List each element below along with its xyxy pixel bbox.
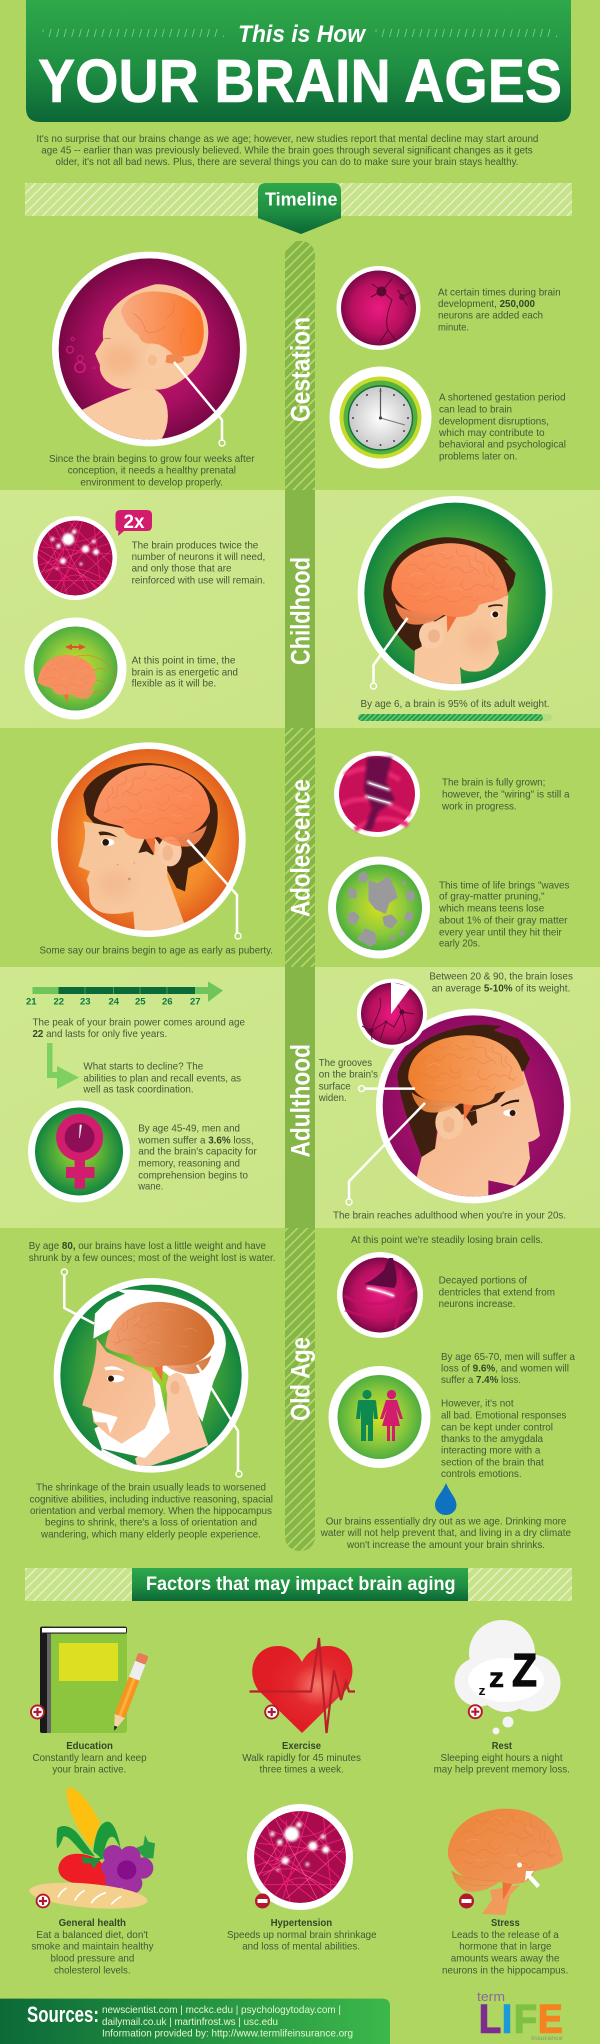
- sources footer: Sources:: [27, 2002, 99, 2027]
- factor: rest text: Sleeping eight hours a night: [440, 1752, 563, 1764]
- text: age 65-70: all bad. Emotional responses: [441, 1410, 566, 1422]
- text: wiring: The brain is fully grown;: [442, 776, 545, 788]
- label: Adulthood: Adulthood: [286, 1044, 316, 1158]
- factor: education text: your brain active.: [52, 1764, 126, 1776]
- text: neurons added: minute.: [438, 322, 469, 334]
- text: energetic and flexible: [132, 654, 238, 690]
- text: age 65-70: However, it's not: [441, 1398, 514, 1410]
- factor: general health text: blood pressure and: [50, 1952, 134, 1964]
- factor: hypertension text: Speeds up normal brain shrinkage: [227, 1929, 377, 1941]
- decorative dashes right: '///////////////////////.: [375, 28, 558, 40]
- text: age 65-70: interacting more with a: [441, 1444, 541, 1456]
- text: weight loss 5-10%: Between 20 & 90, the brain loses: [429, 970, 573, 982]
- sources footer: dailymail.co.uk | martinfrost.ws | usc.edu: [102, 2016, 278, 2028]
- text: dry out: [320, 1516, 571, 1551]
- factor: exercise heart icon: [250, 1638, 355, 1733]
- leader line: child: [370, 618, 408, 689]
- text: weight loss 5-10%: [429, 970, 573, 994]
- caption: adult weight: By age 6, a brain is 95% of its adult weight.: [360, 698, 550, 710]
- text: decline: abilities to plan and recall events, as: [83, 1072, 241, 1084]
- text: neurons added: At certain times during brain: [438, 286, 561, 298]
- text: twice the neurons: [132, 540, 265, 586]
- factor: exercise text: [242, 1740, 361, 1776]
- logo: term life insurance: [477, 1989, 563, 2042]
- leader line: grooves: [359, 1086, 415, 1092]
- factor: education text: Education: [66, 1740, 113, 1752]
- factor: stress text: neurons in the hippocampus.: [442, 1964, 568, 1976]
- factor: general health food icon: [28, 1788, 155, 1913]
- text: grooves: widen.: [318, 1092, 347, 1104]
- factor: exercise text: three times a week.: [260, 1764, 344, 1776]
- minus badge: [255, 1894, 270, 1908]
- decorative dashes left: '///////////////////////.: [42, 28, 225, 40]
- text: grooves: on the brain's: [319, 1068, 378, 1080]
- intro paragraph: older, it's not all bad news. Plus, there are several things you can do to make sure your brain stays healthy.: [56, 156, 518, 168]
- factor: hypertension text: Hypertension: [271, 1917, 332, 1929]
- text: shortened gestation: can lead to brain: [439, 404, 512, 416]
- header banner: [26, 0, 571, 122]
- chart: peak age arrow: 27: [190, 996, 201, 1008]
- text: shrinkage: wandering, which many elderly people experience.: [40, 1528, 261, 1540]
- chart: peak age arrow: 26: [162, 996, 173, 1008]
- icon: water drop: [435, 1483, 456, 1515]
- text: energetic and flexible: At this point in time, the: [132, 654, 236, 666]
- chart: peak age arrow: 23: [80, 996, 91, 1008]
- text: grooves: surface: [319, 1080, 351, 1092]
- sources footer: Information provided by: http://www.termlifeinsurance.org: [102, 2028, 353, 2040]
- logo: term life insurance: I: [502, 1998, 512, 2042]
- text: age 45-49: and the brain's capacity for: [138, 1146, 257, 1158]
- illustration: adult head: [376, 1009, 571, 1203]
- text: shortened gestation: [438, 392, 566, 462]
- factor: hypertension text: and loss of mental abilities.: [242, 1940, 360, 1952]
- text: decline: [82, 1060, 241, 1096]
- logo: term life insurance: term: [477, 1989, 505, 2004]
- text: gray matter: about 1% of their gray matter: [439, 914, 568, 926]
- label: Adolescence: Adolescence: [286, 779, 316, 917]
- text: twice the neurons: reinforced with use will remain.: [132, 574, 265, 586]
- timeline heading: Timeline: [265, 190, 338, 210]
- text: shrinkage: The shrinkage of the brain usually leads to worsened: [36, 1482, 266, 1494]
- text: shortened gestation: which may contribute to: [438, 427, 545, 439]
- text: age 65-70: thanks to the amygdala: [441, 1433, 543, 1445]
- factors heading: Factors that may impact brain aging: [146, 1574, 456, 1595]
- chart: peak age arrow: [26, 982, 223, 1008]
- chart: peak age arrow: 22: [54, 996, 64, 1008]
- factors heading: [25, 1568, 572, 1601]
- text: age 80: By age 80, our brains have lost a little weight and have: [29, 1240, 266, 1252]
- text: weight loss 5-10%: an average 5-10% of its weight.: [432, 982, 570, 994]
- arrow: decline elbow: [47, 1043, 79, 1089]
- factor: rest cloud icon: [454, 1620, 560, 1734]
- plus badge: [264, 1704, 279, 1720]
- leader line: baby: [174, 362, 225, 446]
- logo: term life insurance: F: [514, 1998, 537, 2042]
- title line 2: YOUR BRAIN AGES: [38, 47, 562, 115]
- progress bar: 95 percent: [358, 714, 552, 721]
- text: grooves: [318, 1057, 378, 1104]
- factor: rest cloud icon: Z: [512, 1644, 537, 1696]
- text: age 80: [29, 1240, 276, 1264]
- text: peak brain power: 22 and lasts for only five years.: [32, 1028, 167, 1040]
- text: age 80: shrunk by a few ounces; most of the weight lost is water.: [29, 1252, 276, 1264]
- leader line: adulthood: [346, 1103, 425, 1205]
- factor: general health text: Eat a balanced diet, don't: [36, 1929, 148, 1941]
- chart: peak age arrow: 25: [135, 996, 146, 1008]
- factor: rest text: [434, 1740, 570, 1776]
- text: age 65-70: loss of 9.6%, and women will: [441, 1362, 569, 1374]
- section band: adulthood: [0, 967, 600, 1228]
- leader line: elderly upper: [61, 1269, 94, 1324]
- factor: general health text: [31, 1917, 154, 1976]
- text: age 65-70: controls emotions.: [441, 1468, 522, 1480]
- factor: rest cloud icon: z: [478, 1683, 486, 1698]
- chart: peak age arrow: 24: [108, 996, 120, 1008]
- text: age 45-49: memory, reasoning and: [138, 1158, 240, 1170]
- timeline heading: [25, 183, 572, 234]
- text: energetic and flexible: brain is as energetic and: [132, 666, 238, 678]
- label: Old Age: Old Age: [286, 1337, 316, 1421]
- factor: general health text: General health: [59, 1917, 126, 1929]
- icon: decayed dendrite: [337, 1252, 423, 1338]
- intro paragraph: age 45 -- earlier than was previously believed. While the brain goes through several significant changes as it gets: [41, 144, 533, 156]
- text: age 45-49: [137, 1122, 257, 1192]
- icon: shrinking brain wedge: [357, 979, 427, 1049]
- text: age 45-49: By age 45-49, men and: [138, 1122, 240, 1134]
- icon: 2x neurons circle: [33, 516, 117, 600]
- text: dry out: Our brains essentially dry out as we age. Drinking more: [326, 1516, 567, 1528]
- text: dentricles: Decayed portions of: [439, 1274, 527, 1286]
- leader line: elderly lower: [197, 1365, 242, 1477]
- text: gray matter: of gray-matter pruning,": [439, 890, 545, 902]
- caption: gestation: Since the brain begins to grow four weeks after: [49, 453, 255, 465]
- icon: synapse wiring: [334, 751, 420, 837]
- text: losing brain cells: At this point we're steadily losing brain cells.: [351, 1234, 543, 1246]
- icon: man and woman: [328, 1366, 430, 1468]
- icon: female symbol: [28, 1100, 130, 1202]
- text: shrinkage: begins to shrink, there's a loss of orientation and: [45, 1516, 257, 1528]
- text: wiring: [441, 776, 570, 812]
- text: neurons added: development, 250,000: [438, 298, 535, 310]
- illustration: child head: [358, 496, 552, 691]
- text: age 65-70: can be kept under control: [441, 1422, 553, 1434]
- factor: education book icon: [30, 1627, 149, 1733]
- text: shrinkage: [30, 1482, 273, 1540]
- central timeline bar: [285, 241, 315, 1551]
- text: age 45-49: wane.: [137, 1180, 163, 1192]
- text: grooves: The grooves: [319, 1057, 372, 1069]
- leader line: teen: [188, 840, 241, 939]
- factor: education text: Constantly learn and keep: [32, 1752, 147, 1764]
- intro paragraph: It's no surprise that our brains change as we age; however, new studies report that mental decline may start around: [36, 133, 539, 145]
- text: gray matter: early 20s.: [439, 938, 480, 950]
- text: age 65-70: suffer a 7.4% loss.: [441, 1374, 521, 1386]
- factor: hypertension text: [227, 1917, 377, 1952]
- text: twice the neurons: The brain produces twice the: [132, 540, 258, 552]
- intro paragraph: [36, 133, 539, 168]
- text: wiring: work in progress.: [441, 800, 517, 812]
- factor: stress text: Stress: [491, 1917, 520, 1929]
- text: energetic and flexible: flexible as it will be.: [132, 678, 216, 690]
- factor: rest text: may help prevent memory loss.: [434, 1764, 570, 1776]
- text: gray matter: This time of life brings "waves: [439, 880, 570, 892]
- factor: stress text: Leads to the release of a: [452, 1929, 559, 1941]
- plus badge: [30, 1704, 45, 1720]
- plus badge: [468, 1704, 483, 1719]
- text: dry out: water will not help prevent that, and living in a dry climate: [320, 1527, 571, 1539]
- factor: rest text: Rest: [492, 1740, 512, 1752]
- text: decline: What starts to decline? The: [83, 1060, 203, 1072]
- text: shrinkage: cognitive abilities, including inductive reasoning, spacial: [30, 1494, 273, 1506]
- text: age 65-70: By age 65-70, men will suffer a: [441, 1351, 575, 1363]
- text: gray matter: every year until they hit their: [439, 926, 562, 938]
- factor: general health text: smoke and maintain healthy: [31, 1940, 154, 1952]
- logo: term life insurance: insurance: [531, 2035, 563, 2042]
- text: age 65-70: [441, 1351, 575, 1480]
- factor: stress text: hormone that in large: [459, 1940, 552, 1952]
- sources footer: [0, 1999, 390, 2044]
- icon: flexible brain: [24, 618, 126, 720]
- title line 1: This is How: [238, 21, 366, 48]
- text: age 45-49: comprehension begins to: [138, 1170, 248, 1182]
- text: age 45-49: women suffer a 3.6% loss,: [137, 1134, 254, 1146]
- badge: 2x: [116, 510, 152, 536]
- label: Gestation: Gestation: [286, 317, 316, 422]
- illustration: baby head: [52, 252, 247, 446]
- illustration: teen head: [51, 742, 246, 937]
- text: neurons added: neurons are added each: [438, 310, 543, 322]
- text: shrinkage: orientation and verbal memory. When the hippocampus: [30, 1505, 272, 1517]
- logo: term life insurance: L: [479, 1998, 501, 2042]
- section band: childhood: [0, 490, 600, 728]
- text: age 65-70: section of the brain that: [441, 1456, 544, 1468]
- factor: stress text: [442, 1917, 568, 1976]
- caption: gestation: conception, it needs a healthy prenatal: [68, 464, 236, 476]
- illustration: elderly head: [54, 1278, 248, 1473]
- chart: peak age arrow: 21: [26, 996, 37, 1008]
- text: shortened gestation: behavioral and psychological: [439, 438, 566, 450]
- text: dry out: won't increase the amount your brain shrinks.: [346, 1539, 545, 1551]
- icon: neuron circle: [336, 266, 420, 350]
- text: peak brain power: [32, 1016, 245, 1040]
- text: dentricles: [439, 1274, 555, 1310]
- text: peak brain power: The peak of your brain power comes around age: [32, 1016, 245, 1028]
- factor: exercise text: Walk rapidly for 45 minutes: [242, 1752, 361, 1764]
- text: twice the neurons: number of neurons it will need,: [132, 551, 265, 563]
- factor: hypertension icon: [247, 1804, 353, 1910]
- text: twice the neurons: and only those that are: [132, 562, 232, 574]
- text: neurons added: [438, 286, 561, 334]
- label: Childhood: Childhood: [286, 557, 316, 665]
- text: gray matter: which means teens lose: [438, 902, 544, 914]
- caption: puberty: Some say our brains begin to age as early as puberty.: [40, 944, 273, 956]
- factor: general health text: cholesterol levels.: [54, 1964, 130, 1976]
- sources footer: newscientist.com | mcckc.edu | psychologytoday.com |: [102, 2004, 341, 2016]
- text: gray matter: [438, 880, 570, 950]
- caption: adulthood: The brain reaches adulthood when you're in your 20s.: [333, 1210, 566, 1222]
- minus badge: [459, 1894, 474, 1908]
- factor: exercise text: Exercise: [282, 1740, 321, 1752]
- badge: 2x: 2x: [124, 512, 145, 533]
- icon: gray matter pruning: [328, 856, 430, 958]
- logo: term life insurance: E: [538, 1998, 563, 2042]
- text: shortened gestation: development disruptions,: [439, 416, 549, 428]
- caption: gestation: environment to develop properly.: [80, 476, 223, 488]
- factor: stress brain icon: [448, 1809, 563, 1915]
- icon: clock: [330, 366, 432, 468]
- factor: stress text: amounts wears away the: [451, 1952, 560, 1964]
- caption: gestation: [49, 453, 255, 488]
- text: shortened gestation: problems later on.: [439, 450, 517, 462]
- plus badge: [36, 1894, 50, 1908]
- factor: education text: [32, 1740, 147, 1776]
- text: dentricles: neurons increase.: [439, 1298, 516, 1310]
- text: shortened gestation: A shortened gestation period: [439, 392, 566, 404]
- factor: rest cloud icon: z: [489, 1662, 504, 1693]
- text: wiring: however, the "wiring" is still a: [442, 788, 570, 800]
- text: dentricles: dentricles that extend from: [439, 1286, 555, 1298]
- text: decline: well as task coordination.: [82, 1084, 194, 1096]
